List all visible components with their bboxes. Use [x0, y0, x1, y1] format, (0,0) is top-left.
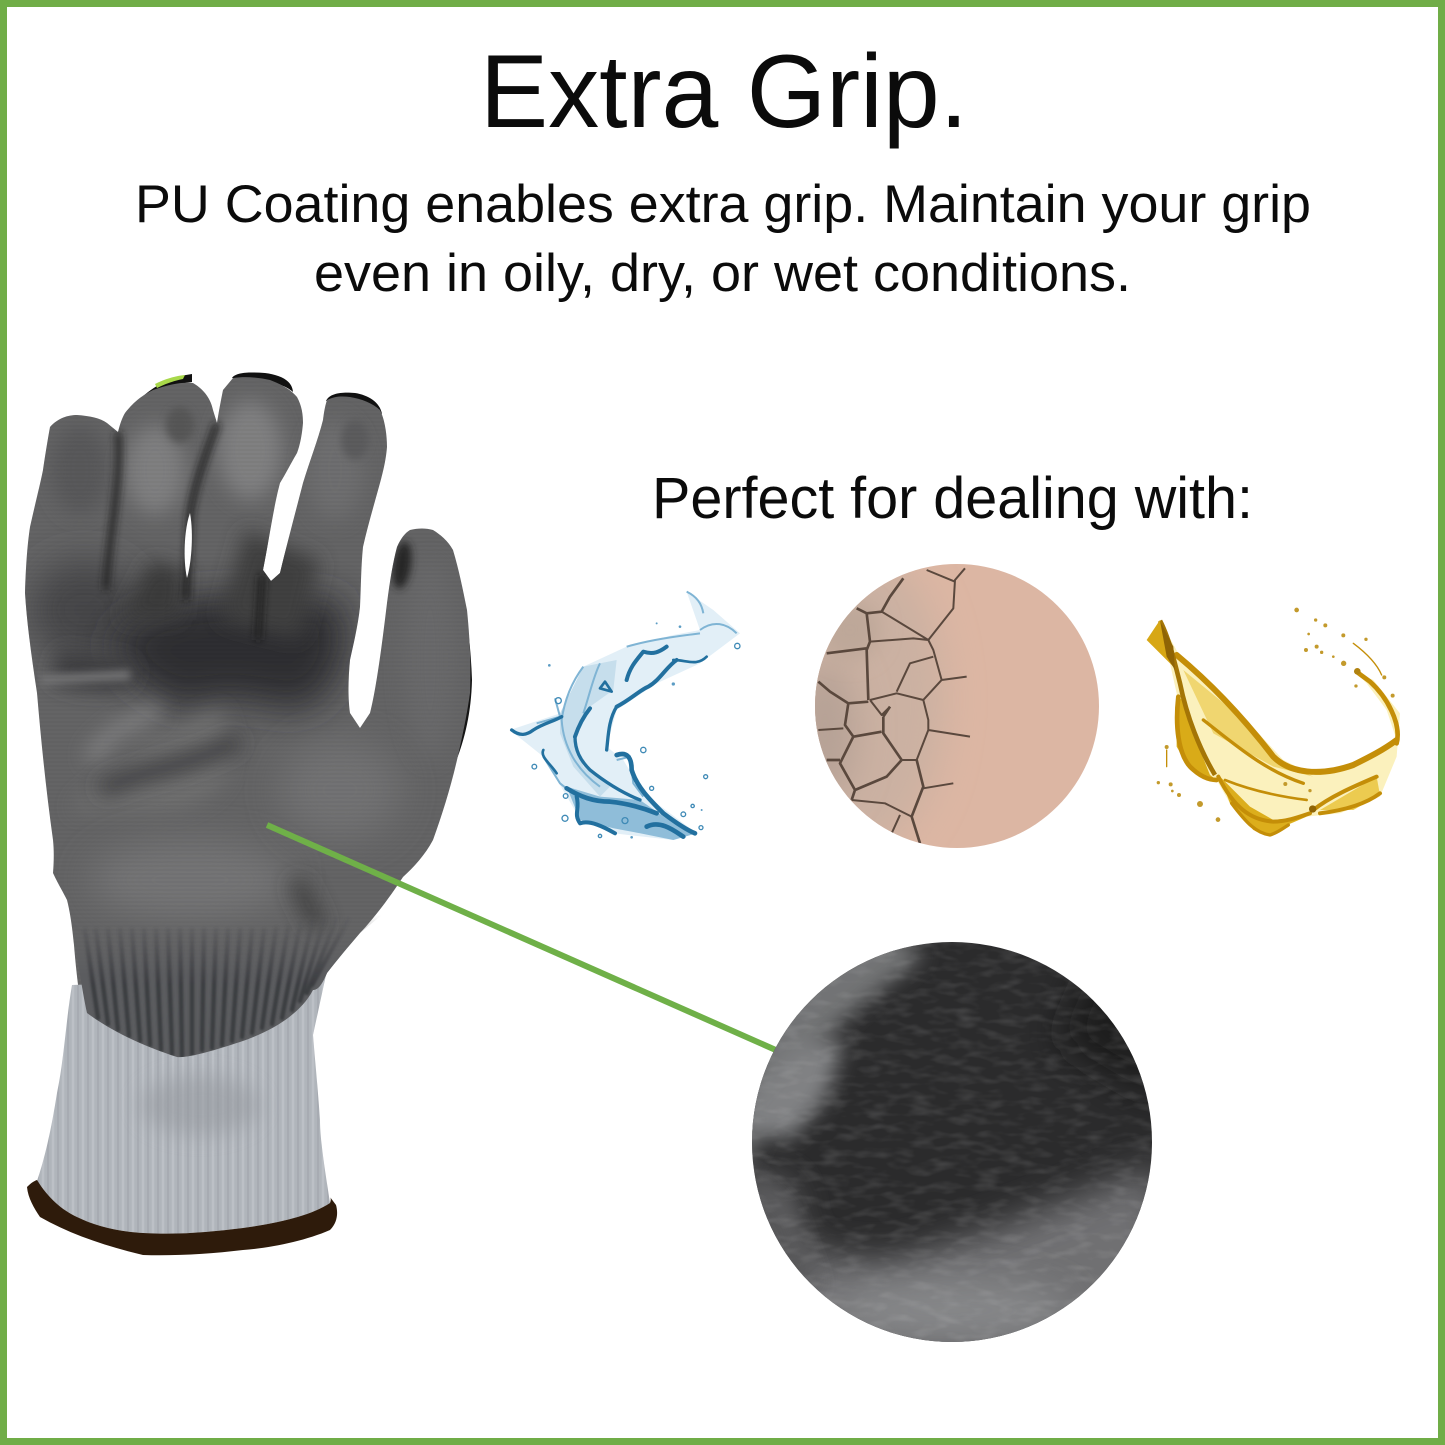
glove brown hem — [27, 1180, 337, 1255]
glove ribbed band — [80, 918, 378, 1058]
callout line — [267, 825, 778, 1051]
glove cuff — [36, 975, 330, 1234]
subtitle text: PU Coating enables extra grip. Maintain your grip — [135, 175, 1311, 234]
icon: dry cracked skin circle — [815, 564, 1099, 848]
glove photo illustration — [25, 372, 472, 1256]
glove coated body — [25, 377, 470, 985]
gap between ring and middle fingers — [185, 513, 192, 578]
glove black back edges — [122, 373, 472, 780]
subtitle text: even in oily, dry, or wet conditions. — [314, 244, 1131, 303]
PU coating closeup circle — [752, 942, 1152, 1342]
icon: golden oil splash — [1147, 608, 1400, 837]
heading: perfect for dealing with: Perfect for dealing with: — [652, 466, 1253, 531]
subtitle text — [135, 175, 1311, 303]
icon: water splash — [510, 592, 740, 840]
title: Extra Grip. — [480, 34, 968, 150]
